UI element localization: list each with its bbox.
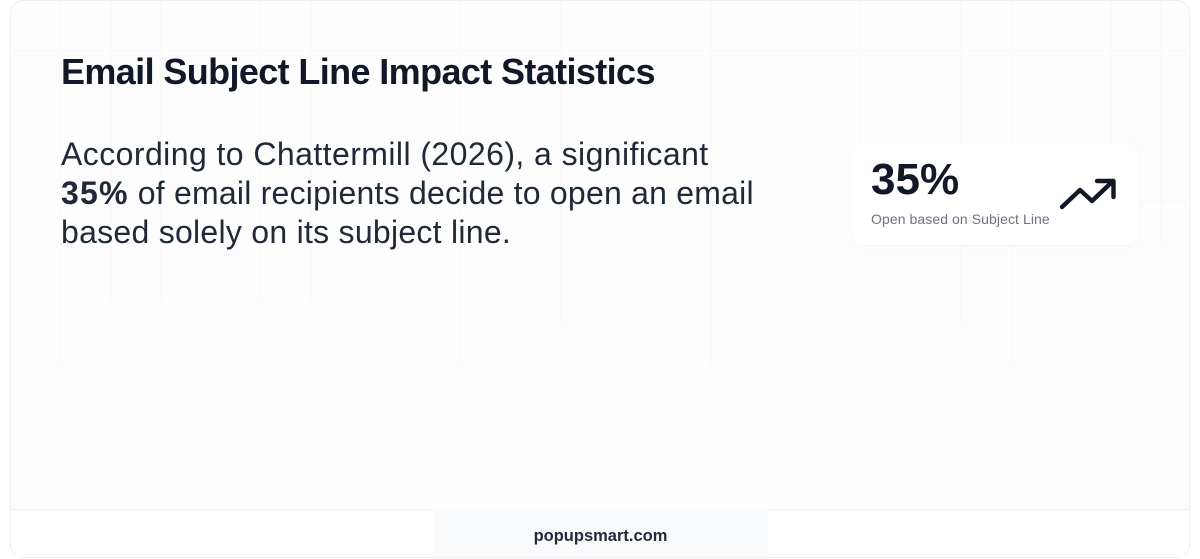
stat caption: Open based on Subject Line: [871, 211, 1050, 227]
footer centre panel: [433, 509, 768, 559]
panel: stat card: [851, 143, 1139, 245]
title: Email Subject Line Impact Statistics: [61, 51, 655, 92]
text block: description: based solely on its subject line.: [61, 214, 511, 250]
text block: description: According to Chattermill (2026), a significant: [61, 136, 709, 172]
footer site name: popupsmart.com: [534, 527, 667, 545]
footer bar: [11, 509, 1189, 559]
stat number: 35%: [871, 155, 959, 204]
text block: description: 35% of email recipients decide to open an email: [61, 175, 754, 211]
icon: trending up arrow: [1060, 178, 1116, 210]
text block: description: [61, 136, 754, 250]
